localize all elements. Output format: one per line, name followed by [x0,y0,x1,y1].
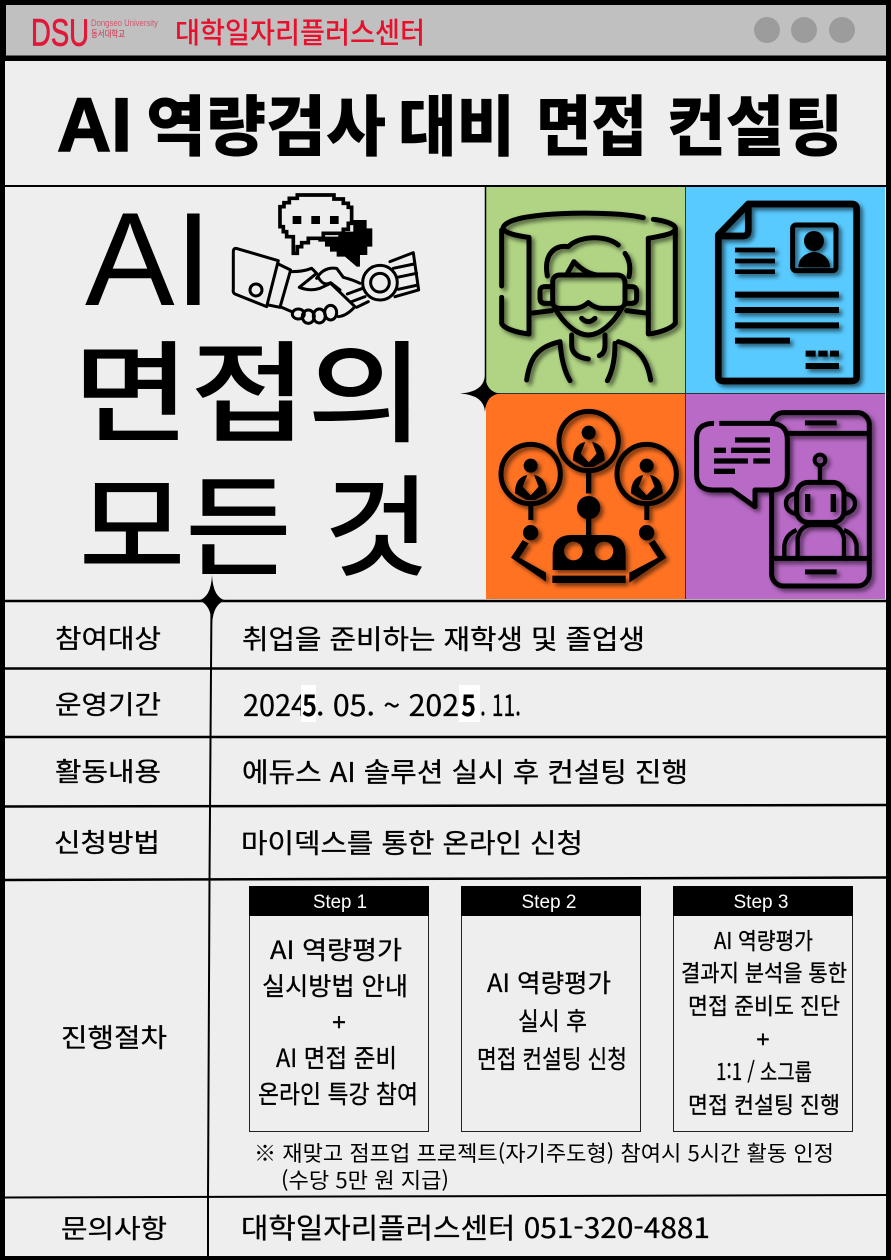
logo: DSU Dongseo University [31,12,158,54]
footnote: (수당 5만 원 지급) [281,1164,449,1195]
row: contact: 문의사항 [61,1209,167,1246]
tile: VR interview [486,187,685,393]
headline: AI: AI [85,186,212,334]
title: 컨설팅 [667,74,843,170]
icon: handshake with chat bubbles [233,195,419,323]
row: period: 운영기간 [55,685,161,722]
row: application: 마이덱스를 통한 온라인 신청 [241,822,583,861]
row: application: 신청방법 [54,823,160,860]
row: application [54,822,583,861]
title: 면접 [536,74,647,170]
row: contact [61,1207,710,1247]
window dots [754,17,855,43]
title: 대비 [398,74,515,170]
tile: resume document [686,187,885,393]
row: contact: 대학일자리플러스센터 051-320-4881 [241,1207,710,1247]
step 2 box [461,886,641,1132]
panel: four icon tiles [486,187,885,599]
logo: DSU Dongseo University: DSU [31,12,89,54]
title [57,74,843,170]
footnote: ※ 재맞고 점프업 프로젝트(자기주도형) 참여시 5시간 활동 인정 [254,1137,834,1168]
step 3 box: Step 3 [734,892,788,913]
row: target [55,618,645,657]
row: period: 5 [461,683,476,725]
step 3 box: 결과지 분석을 통한 [681,954,847,988]
header center name: 대학일자리플러스센터 [175,10,425,52]
row: period: . 11. [480,683,521,725]
title: 역량검사 [146,74,386,170]
row: period [55,683,521,725]
headline: 모든 것: 모든 것 [79,439,430,599]
step 3 box: 면접 준비도 진단 [688,987,840,1021]
logo: DSU Dongseo University: 동서대학교 [91,27,125,40]
headline: 면접의: 면접의 [73,305,424,465]
step 3 box [673,886,853,1132]
row label: procedure: 진행절차 [61,1018,167,1055]
footnote [254,1137,834,1195]
step 1 box [249,886,429,1132]
step 1 box: AI 역량평가 [270,931,402,967]
step 2 box: 실시 후 [518,1002,587,1038]
step 1 box: Step 1 [313,892,367,913]
star ornaments [198,375,500,625]
grid lines between tiles [486,187,885,599]
step 2 box: Step 2 [522,892,576,913]
title: AI [57,83,132,168]
step 2 box: 면접 컨설팅 신청 [477,1040,627,1076]
step 1 box: 실시방법 안내 [262,967,408,1003]
row: period: 5 [302,683,317,725]
logo: DSU Dongseo University: Dongseo University [91,18,158,28]
row: activity: 활동내용 [55,752,161,789]
step 2 box: AI 역량평가 [487,964,611,1000]
row: target: 참여대상 [55,619,161,656]
tile: chatbot phone [686,394,885,599]
step 1 box: 온라인 특강 참여 [258,1075,418,1111]
step 3 box: 1:1 / 소그룹 [716,1053,812,1087]
step 3 box: 면접 컨설팅 진행 [688,1086,840,1120]
step 3 box: AI 역량평가 [714,922,813,956]
row: period: 2024 [243,683,307,725]
row: period: . 05. ~ 202 [316,683,459,725]
step 3 box: + [756,1026,770,1052]
step 1 box: AI 면접 준비 [276,1039,397,1075]
step 1 box: + [332,1009,346,1036]
row: activity: 에듀스 AI 솔루션 실시 후 컨설팅 진행 [242,751,688,790]
row: activity [55,751,688,790]
browser-style header bar [6,5,886,56]
row: target: 취업을 준비하는 재학생 및 졸업생 [242,618,645,657]
tile: AI and candidates [486,394,685,599]
